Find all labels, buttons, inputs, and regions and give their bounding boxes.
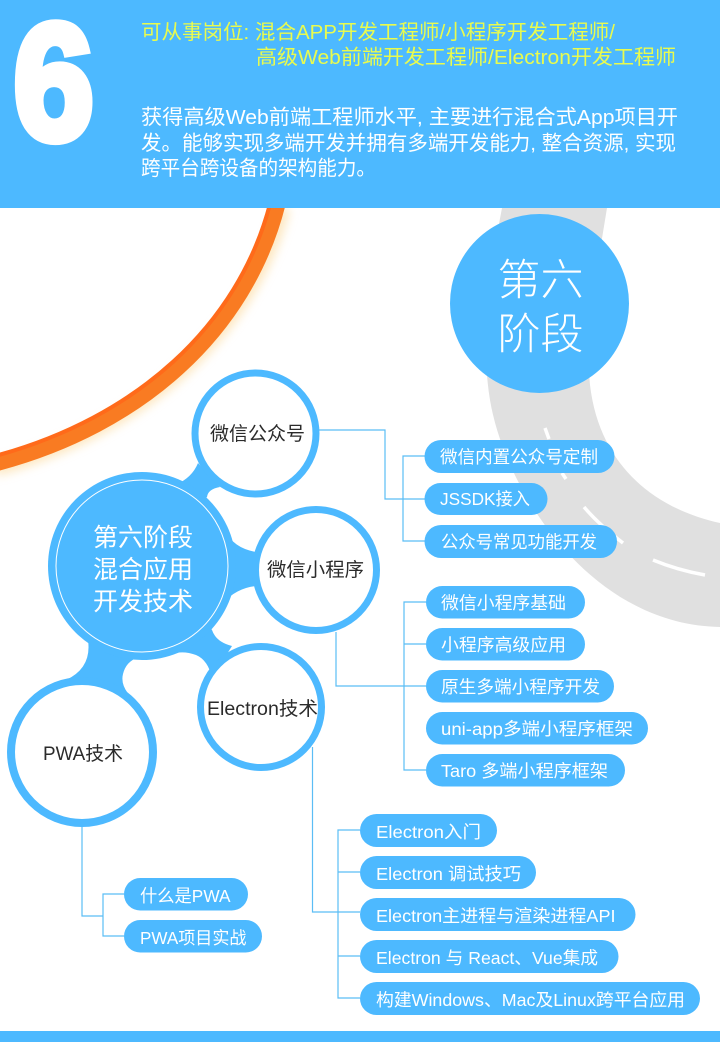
node: 微信小程序: 微信小程序 bbox=[267, 559, 364, 581]
job titles: 高级Web前端开发工程师/Electron开发工程师 bbox=[256, 46, 676, 69]
group: PWA topics bbox=[124, 878, 262, 952]
bottom band bbox=[0, 1031, 720, 1042]
node: Electron技术: Electron技术 bbox=[207, 698, 318, 720]
group: 微信小程序 topics: 原生多端小程序开发 bbox=[441, 677, 600, 697]
group: Electron topics: Electron 调试技巧 bbox=[376, 864, 521, 884]
description: 跨平台跨设备的架构能力。 bbox=[141, 157, 376, 180]
node: PWA技术 bbox=[11, 681, 153, 823]
central node bbox=[48, 472, 236, 660]
group: Electron topics: Electron 与 React、Vue集成 bbox=[376, 948, 598, 968]
group: Electron topics: 构建Windows、Mac及Linux跨平台应用 bbox=[376, 990, 685, 1010]
group: Electron topics: Electron入门 bbox=[376, 822, 481, 842]
group: Electron topics bbox=[360, 814, 700, 1015]
description bbox=[141, 106, 678, 180]
description: 获得高级Web前端工程师水平, 主要进行混合式App项目开 bbox=[141, 106, 678, 129]
stage badge bbox=[450, 214, 629, 393]
group: 微信小程序 topics: uni-app多端小程序框架 bbox=[441, 719, 633, 739]
connector lines bbox=[82, 430, 426, 998]
road graphic bbox=[486, 208, 720, 627]
stage badge: 第六 bbox=[498, 257, 584, 305]
node: 微信公众号: 微信公众号 bbox=[210, 423, 305, 445]
group: Electron topics: Electron主进程与渲染进程API bbox=[376, 906, 616, 926]
group: PWA topics: 什么是PWA bbox=[140, 886, 231, 906]
group: 微信公众号 topics: JSSDK接入 bbox=[440, 489, 530, 509]
stage badge: 阶段 bbox=[498, 311, 584, 359]
mind map hub connectors bbox=[66, 463, 256, 698]
group: 微信小程序 topics: 微信小程序基础 bbox=[441, 593, 566, 613]
job titles bbox=[141, 21, 676, 69]
header band bbox=[0, 0, 720, 208]
description: 发。能够实现多端开发并拥有多端开发能力, 整合资源, 实现 bbox=[141, 132, 676, 155]
group: PWA topics: PWA项目实战 bbox=[140, 928, 246, 948]
central node: 第六阶段 bbox=[93, 524, 193, 552]
node: 微信小程序 bbox=[256, 510, 376, 630]
node: PWA技术: PWA技术 bbox=[43, 743, 123, 765]
group: 微信公众号 topics: 微信内置公众号定制 bbox=[440, 447, 598, 467]
group: 微信小程序 topics: 小程序高级应用 bbox=[441, 635, 566, 655]
central node: 混合应用 bbox=[93, 556, 193, 584]
node: Electron技术 bbox=[200, 646, 322, 768]
orange arc bbox=[0, 204, 283, 469]
node: 微信公众号 bbox=[195, 373, 316, 494]
job titles: 可从事岗位: 混合APP开发工程师/小程序开发工程师/ bbox=[141, 21, 615, 44]
group: 微信小程序 topics: Taro 多端小程序框架 bbox=[441, 761, 608, 781]
group: 微信公众号 topics: 公众号常见功能开发 bbox=[441, 532, 597, 552]
central node: 开发技术 bbox=[93, 588, 193, 616]
group: 微信公众号 topics bbox=[424, 440, 617, 558]
group: 微信小程序 topics bbox=[426, 586, 648, 786]
